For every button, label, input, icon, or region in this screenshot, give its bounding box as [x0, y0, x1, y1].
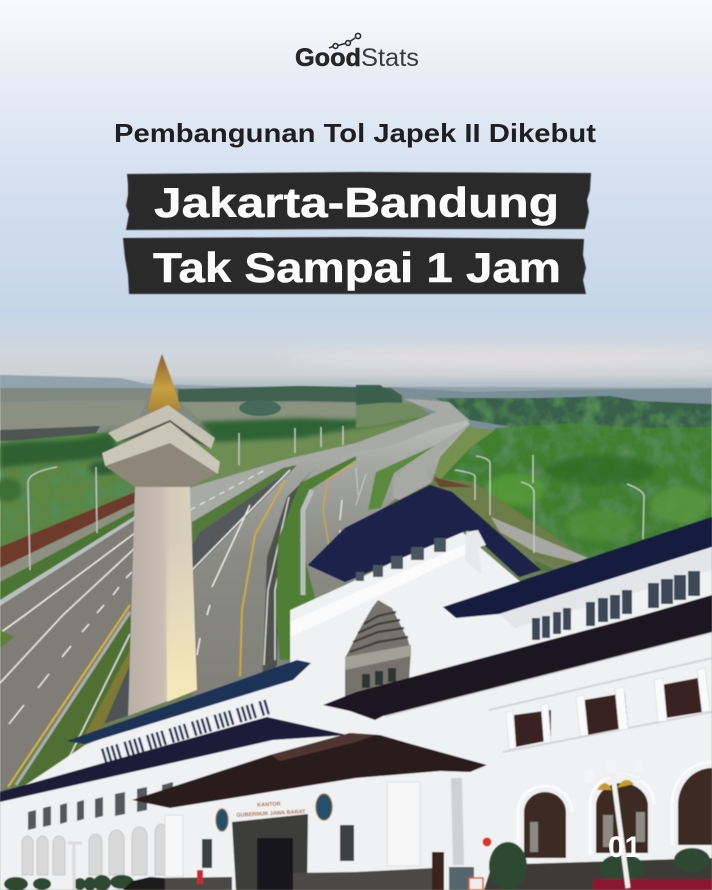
- logo: GoodStats: [295, 33, 419, 72]
- base plinth: [165, 868, 434, 890]
- parked car: [123, 877, 165, 890]
- left upper navy roof: [67, 660, 311, 744]
- brown soil strip: [0, 492, 135, 568]
- monument capital: [105, 443, 218, 487]
- shrubs: [4, 842, 710, 890]
- rails between B and median: [262, 467, 317, 690]
- left wing arches: [22, 824, 167, 875]
- central wing cornice: [290, 542, 470, 637]
- headline text 1: Jakarta-Bandung: [154, 179, 559, 226]
- left embankment: [16, 612, 135, 787]
- headline line 1 on torn tape: [126, 172, 591, 230]
- upper right windows: [532, 571, 700, 640]
- right main dark roof: [323, 595, 712, 720]
- building sign: KANTOR: [257, 801, 281, 809]
- service road and verge: [0, 503, 135, 582]
- road B: [192, 453, 356, 700]
- lawn beside road: [432, 425, 495, 480]
- headline text 2: Tak Sampai 1 Jam: [153, 244, 561, 291]
- central upper roof: [308, 485, 541, 582]
- street lamp in front: [585, 760, 643, 888]
- front windows: [202, 825, 354, 868]
- white walls: [0, 530, 712, 890]
- tape 1: [126, 172, 591, 230]
- arched windows: [524, 768, 712, 858]
- sky background: [0, 0, 712, 390]
- wide grass median: [276, 456, 356, 660]
- monument flame: [147, 354, 181, 412]
- small grass patch at left edge: [0, 630, 14, 648]
- subtitle: Pembangunan Tol Japek II Dikebut: [114, 118, 596, 148]
- entrance pillars: [165, 815, 183, 877]
- road A: [189, 399, 469, 522]
- photo: landscape and toll road: [0, 348, 712, 890]
- arch mouldings: [518, 762, 712, 860]
- left wing windows: [28, 782, 173, 830]
- distant road section: [491, 517, 588, 563]
- monument shaft: [128, 486, 197, 716]
- logo wordmark Stats: Stats: [361, 44, 419, 72]
- tape 2: [123, 237, 586, 294]
- small red figure: [197, 870, 203, 884]
- building sign: [236, 801, 306, 819]
- red wall ornament: [482, 838, 492, 846]
- green fields behind road: [190, 405, 446, 488]
- second floor windows: [514, 677, 703, 747]
- entrance dark roof: [132, 733, 487, 808]
- green fields left: [0, 432, 140, 547]
- road markings: [0, 468, 366, 724]
- door: [432, 852, 444, 890]
- page number: 01: [608, 831, 641, 864]
- left balustrade: [103, 706, 270, 756]
- right wall cornice bands: [385, 632, 712, 752]
- right column pilasters: [506, 668, 710, 749]
- utility box: [449, 867, 474, 890]
- building emblems: [216, 794, 332, 831]
- logo wordmark Good: Good: [295, 44, 361, 72]
- left carriageway surface: [0, 520, 135, 792]
- entrance portal: [232, 814, 308, 890]
- monument: [102, 354, 220, 716]
- gutter pipe: [451, 778, 464, 865]
- top right navy roof: [443, 517, 712, 618]
- central upper wing windows: [356, 538, 446, 581]
- street lamp at left: [68, 842, 82, 890]
- right near forest: [440, 423, 712, 572]
- logo chart icon: [329, 33, 361, 48]
- orange dispenser: [469, 878, 483, 890]
- monument shaft highlight: [166, 540, 197, 702]
- headline line 2 on torn tape: [123, 237, 586, 294]
- median A-B: [192, 465, 297, 546]
- building sign: GUBERNUR JAWA BARAT: [236, 809, 306, 819]
- left lower dark roof: [0, 717, 347, 802]
- photo: Gedung Sate government building: [0, 485, 712, 890]
- road backing surface: [190, 399, 470, 700]
- red flowers: [593, 879, 712, 890]
- left fields: [0, 388, 460, 560]
- median C-D: [368, 445, 436, 510]
- distant hills: [0, 375, 712, 420]
- land base: [0, 388, 712, 890]
- right distant forest: [389, 387, 712, 440]
- pink clouds: [280, 348, 712, 368]
- road D: [393, 423, 471, 500]
- street lamps: [28, 426, 644, 570]
- gable tower: [345, 600, 411, 705]
- road C: [300, 420, 469, 600]
